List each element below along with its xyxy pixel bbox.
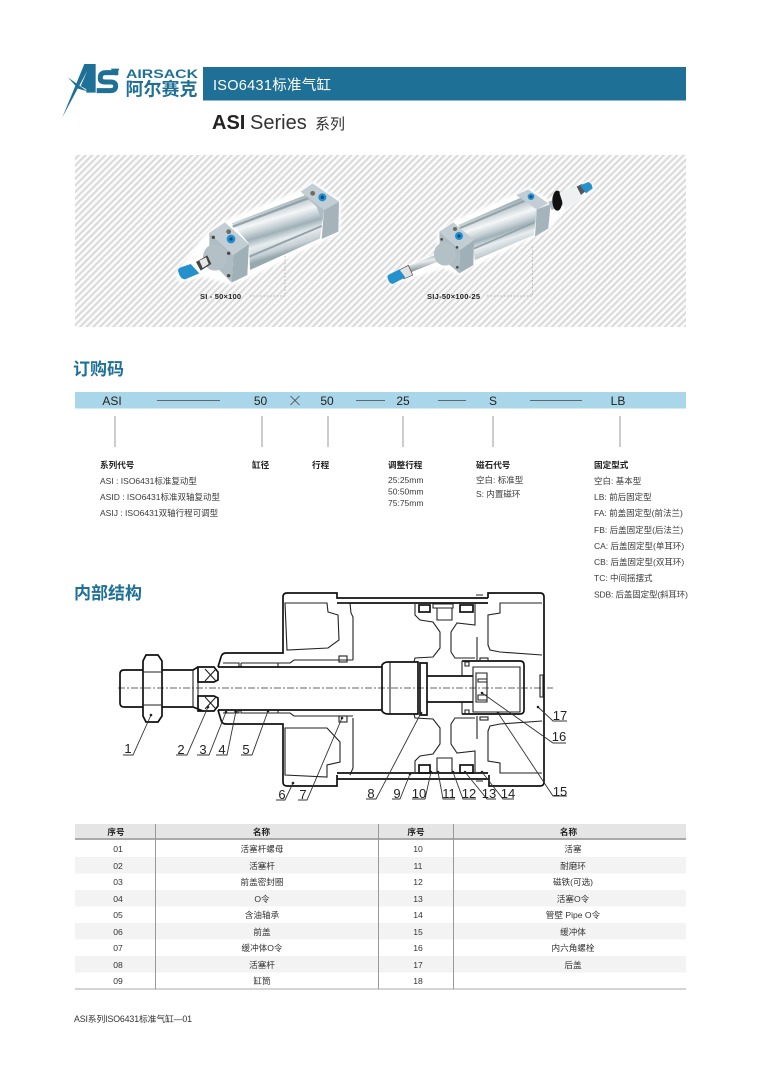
- caption: SIJ-50x100-25: SIJ-50×100-25: [427, 292, 480, 301]
- order code bar: ASI: [102, 394, 122, 408]
- series title: 系列: [315, 116, 345, 133]
- front cover: [218, 593, 488, 786]
- text block: adjustable stroke: 75:75mm: [388, 498, 423, 508]
- text block: mounting type: 固定型式: [594, 459, 629, 470]
- text block: mounting type: CB: 后盖固定型(双耳环): [594, 557, 684, 567]
- table rows: left: 活塞杆螺母: [241, 843, 284, 854]
- table rows: right: 管壁 Pipe O令: [546, 909, 601, 920]
- footer: ASI系列ISO6431标准气缸—01: [74, 1013, 192, 1024]
- table rows: right: 16: [413, 943, 423, 953]
- part numbers: 16: [552, 729, 566, 744]
- table rows: left: 活塞杆: [249, 959, 275, 970]
- text block: mounting type: SDB: 后盖固定型(斜耳环): [594, 590, 688, 600]
- order code bar: 50: [320, 394, 334, 408]
- part numbers: 3: [199, 742, 207, 757]
- table rows: right: 13: [413, 894, 423, 904]
- table header: 名称: [253, 826, 270, 837]
- text block: mounting type: 空白: 基本型: [594, 476, 642, 486]
- text block: adjustable stroke: 调整行程: [388, 459, 423, 470]
- part numbers: 4: [218, 742, 226, 757]
- table rows: right: 磁铁(可选): [553, 876, 593, 887]
- table rows: right: 后盖: [564, 959, 582, 970]
- table rows: left: 前盖密封圈: [241, 876, 283, 887]
- table rows: left: 05: [113, 910, 123, 920]
- parts table: [75, 824, 686, 989]
- table rows: left: 缓冲体O令: [241, 942, 283, 953]
- series title: ASI: [212, 112, 245, 134]
- text block: series code: 系列代号: [100, 459, 135, 470]
- header bar: [203, 67, 686, 100]
- table rows: left: 前盖: [253, 926, 271, 937]
- logo: AIRSACK: 阿尔赛克: [126, 78, 198, 100]
- part numbers: 14: [501, 786, 515, 801]
- rear cover: [476, 593, 544, 786]
- part numbers: 10: [412, 786, 426, 801]
- part numbers: [124, 708, 567, 802]
- table header: 序号: [407, 826, 425, 837]
- part numbers: 5: [242, 742, 250, 757]
- part numbers: 6: [278, 787, 286, 802]
- text block: adjustable stroke: 50:50mm: [388, 486, 423, 496]
- part numbers: 1: [124, 741, 132, 756]
- order code bar: 25: [396, 394, 410, 408]
- text block: series code: ASI : ISO6431标准复动型: [100, 476, 197, 486]
- text block: series code: ASID : ISO6431标准双轴复动型: [100, 492, 220, 502]
- front seal: [198, 667, 218, 711]
- order code bar: S: [489, 394, 497, 408]
- table rows: right: 18: [413, 976, 423, 986]
- code tick lines: [115, 416, 620, 447]
- table rows: left: 活塞杆: [249, 860, 275, 871]
- heading: internal structure: 内部结构: [74, 583, 142, 603]
- text block: mounting type: CA: 后盖固定型(单耳环): [594, 541, 684, 551]
- heading: order code: 订购码: [73, 360, 124, 379]
- text block: mounting type: TC: 中间摇摆式: [594, 573, 653, 583]
- table rows: right: 11: [414, 861, 423, 871]
- table rows: right: [413, 843, 601, 986]
- table rows: right: 耐磨环: [560, 860, 586, 871]
- text block: magnet code: [476, 459, 524, 499]
- logo: AIRSACK: AIRSACK: [126, 67, 199, 81]
- part numbers: 12: [462, 786, 476, 801]
- cushion and bolt: [462, 658, 524, 720]
- text block: series code: ASIJ : ISO6431双轴行程可调型: [100, 508, 219, 518]
- table header: 序号: [107, 826, 125, 837]
- table rows: right: 17: [413, 960, 423, 970]
- order code bar: LB: [611, 394, 625, 408]
- table rows: left: 缸筒: [253, 975, 271, 986]
- product: SIJ-50x100-25 cylinder: [387, 182, 593, 296]
- part numbers: 13: [482, 786, 496, 801]
- text block: stroke: 行程: [312, 459, 330, 470]
- text block: mounting type: [594, 459, 688, 600]
- table rows: right: 15: [413, 927, 423, 937]
- text block: magnet code: S: 内置磁环: [476, 489, 521, 499]
- table rows: left: [113, 843, 284, 986]
- table rows: left: 03: [113, 877, 123, 887]
- part numbers: 17: [553, 708, 567, 723]
- part numbers: 15: [553, 784, 567, 799]
- logo: AIRSACK: [62, 64, 199, 117]
- piston rod: [218, 662, 473, 715]
- product: SI-50x100 cylinder: [177, 183, 339, 296]
- cross-section diagram: [118, 593, 567, 802]
- piston: [414, 604, 477, 773]
- table rows: right: 活塞O令: [557, 893, 590, 904]
- part numbers: 11: [442, 786, 456, 801]
- table rows: right: 缓冲体: [560, 926, 586, 937]
- leader dots: [150, 692, 539, 784]
- header bar: ISO6431标准气缸: [213, 76, 331, 94]
- part numbers: 9: [393, 786, 401, 801]
- part numbers: 2: [177, 742, 185, 757]
- table rows: left: 01: [113, 844, 123, 854]
- text block: adjustable stroke: [388, 459, 423, 508]
- table header: [107, 826, 577, 837]
- order code bar: 50: [254, 394, 267, 408]
- part numbers: 7: [299, 787, 307, 802]
- text block: mounting type: FB: 后盖固定型(后法兰): [594, 525, 683, 535]
- text block: mounting type: FA: 前盖固定型(前法兰): [594, 508, 683, 518]
- table header: 名称: [560, 826, 577, 837]
- text block: series code: [100, 459, 220, 518]
- table rows: right: 活塞: [564, 843, 582, 854]
- table rows: left: 06: [113, 927, 123, 937]
- table rows: right: 14: [413, 910, 423, 920]
- order code bar: [75, 392, 686, 408]
- table rows: left: 09: [113, 976, 123, 986]
- text block: magnet code: 空白: 标准型: [476, 475, 524, 485]
- series title: Series: [250, 112, 307, 134]
- table rows: left: 02: [113, 861, 123, 871]
- leader lines: [123, 693, 567, 800]
- table rows: right: 内六角螺栓: [552, 942, 595, 953]
- text block: mounting type: LB: 前后固定型: [594, 492, 652, 502]
- text block: adjustable stroke: 25:25mm: [388, 475, 423, 485]
- table rows: left: O令: [254, 893, 270, 904]
- table rows: left: 08: [113, 960, 123, 970]
- table rows: left: 07: [113, 943, 123, 953]
- table rows: right: 10: [413, 844, 423, 854]
- rod end and nut: [120, 655, 203, 722]
- series title: [212, 112, 345, 134]
- panel: product photos: [75, 155, 686, 327]
- text block: magnet code: 磁石代号: [476, 459, 511, 470]
- table rows: right: 12: [413, 877, 423, 887]
- text block: bore: 缸径: [252, 459, 270, 470]
- caption: SI-50x100: SI - 50×100: [200, 292, 241, 301]
- table rows: left: 含油轴承: [245, 909, 280, 920]
- table rows: left: 04: [113, 894, 123, 904]
- part numbers: 8: [367, 786, 375, 801]
